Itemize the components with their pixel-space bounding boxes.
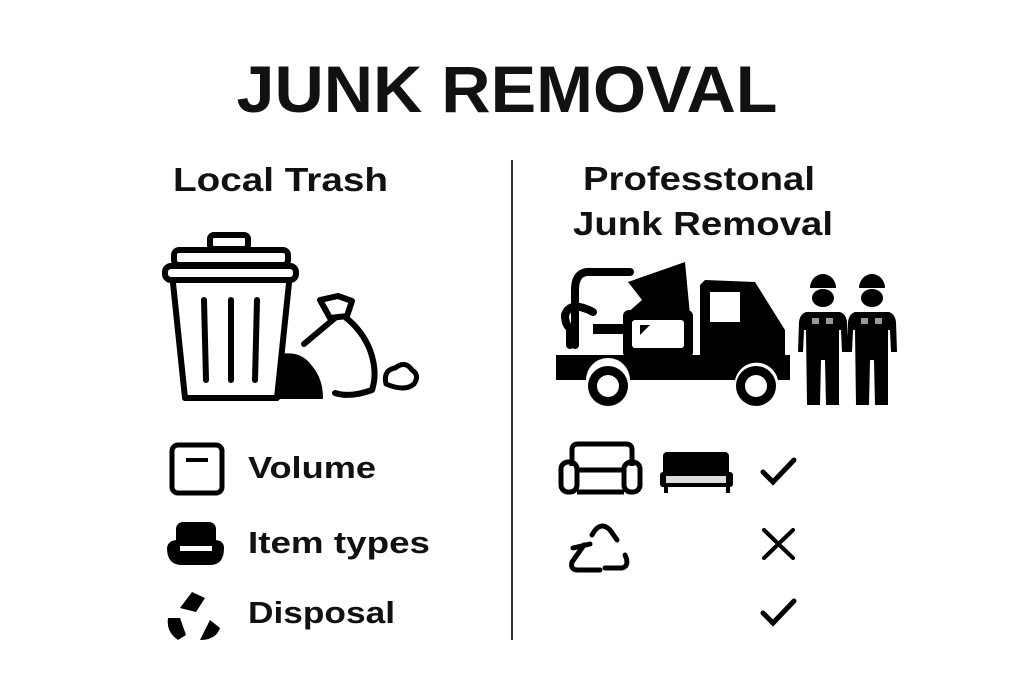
- row: disposal: Disposal: [248, 595, 395, 630]
- icon: armchair: [561, 444, 640, 492]
- row: disposal: [168, 592, 395, 640]
- icon: workers: [798, 274, 897, 405]
- heading: professional junk removal: Junk Removal: [573, 205, 833, 242]
- icon: sofa: [660, 452, 733, 493]
- icon: check 2: [763, 601, 794, 623]
- heading: professional junk removal: Professtonal: [583, 160, 815, 197]
- icon: trash can with bag: [165, 235, 417, 398]
- row: item types: [167, 522, 430, 565]
- icon: recycle outline: [572, 526, 627, 570]
- icon: truck with furniture: [556, 262, 790, 406]
- heading: local trash: Local Trash: [173, 161, 388, 198]
- heading: professional junk removal: [573, 160, 833, 242]
- title: JUNK REMOVAL: [236, 52, 778, 126]
- row: volume: Volume: [248, 450, 376, 485]
- icon: cross: [764, 530, 793, 558]
- row: volume: [172, 445, 376, 493]
- row: item types: Item types: [248, 525, 430, 560]
- icon: check 1: [763, 460, 794, 482]
